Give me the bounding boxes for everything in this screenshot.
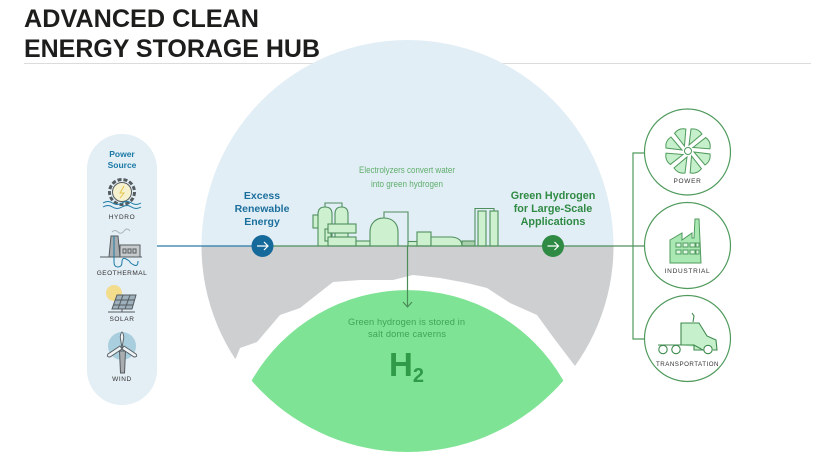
power source heading: Source — [108, 160, 137, 170]
excess energy label: Energy — [244, 216, 280, 228]
icon: turbine fan — [662, 125, 714, 177]
icon: wind — [107, 332, 137, 373]
excess energy label: Excess — [244, 190, 280, 202]
icon: solar — [106, 285, 136, 312]
icon: geothermal — [100, 229, 142, 267]
electrolyzer caption — [359, 165, 455, 190]
sky — [202, 40, 614, 246]
cavern caption — [348, 317, 465, 339]
large circle: sky, ground and cavern — [190, 30, 630, 453]
label: solar: SOLAR — [109, 316, 135, 323]
label: transportation: TRANSPORTATION — [656, 361, 719, 368]
hydrogen symbol: 2 — [413, 365, 424, 387]
arrow button: green hydrogen — [542, 235, 564, 257]
title: ENERGY STORAGE HUB — [24, 35, 320, 63]
green hydrogen applications label: for Large-Scale — [514, 203, 592, 215]
electrolyzer caption: Electrolyzers convert water — [359, 165, 455, 176]
label: geothermal: GEOTHERMAL — [97, 270, 147, 277]
title — [24, 5, 320, 63]
application: power — [644, 109, 730, 195]
power source panel — [87, 134, 157, 405]
green hydrogen applications label: Applications — [521, 216, 585, 228]
application: industrial — [644, 202, 730, 288]
icon: factory — [670, 219, 701, 263]
cavern caption: Green hydrogen is stored in — [348, 317, 465, 327]
label: industrial: INDUSTRIAL — [665, 268, 710, 275]
electrolyzer caption: into green hydrogen — [371, 179, 443, 190]
cavern caption: salt dome caverns — [368, 329, 446, 339]
icon: hydro — [103, 180, 141, 208]
icon: truck — [658, 313, 717, 354]
application: transportation — [644, 296, 730, 382]
label: wind: WIND — [112, 376, 132, 383]
hydrogen plant illustration — [313, 203, 498, 246]
label: hydro: HYDRO — [109, 214, 135, 221]
power source heading: Power — [109, 149, 135, 159]
excess energy label: Renewable — [235, 203, 290, 215]
label: power: POWER — [673, 178, 702, 185]
arrow button: excess energy — [252, 235, 274, 257]
arrow: down into cavern — [403, 246, 412, 307]
title: ADVANCED CLEAN — [24, 5, 259, 33]
hydrogen symbol: H — [389, 346, 413, 383]
salt dome cavern — [252, 290, 564, 452]
energy flow lines — [157, 153, 644, 339]
green hydrogen applications label: Green Hydrogen — [511, 190, 595, 202]
ground — [190, 246, 630, 370]
